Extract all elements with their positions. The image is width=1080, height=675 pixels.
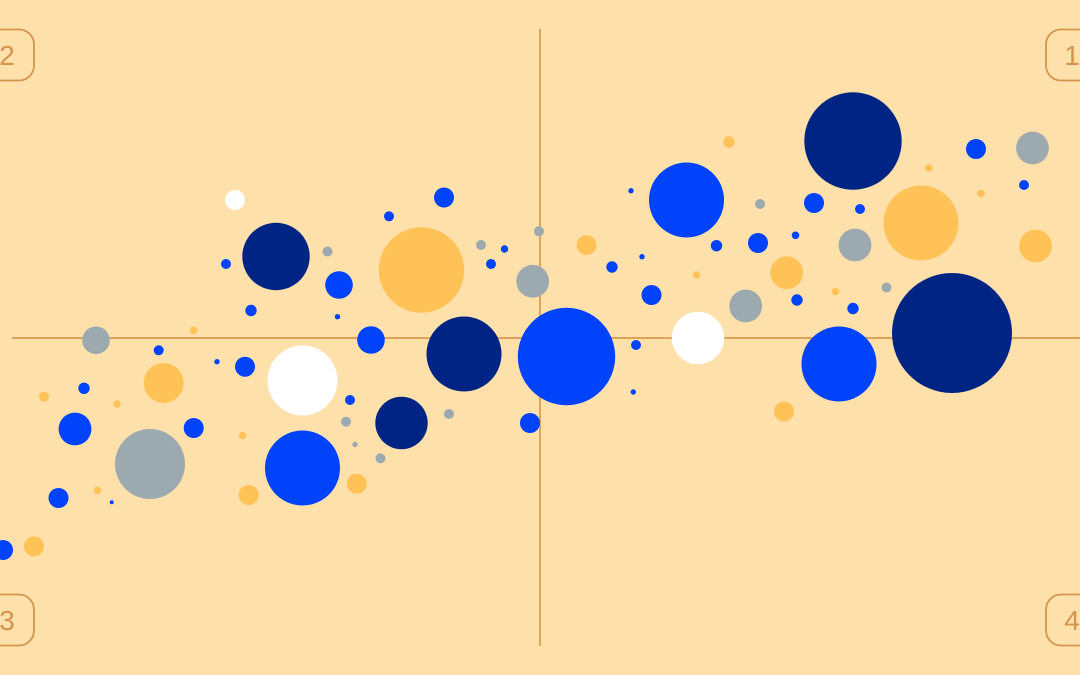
badge: quadrant 1 — [1046, 30, 1080, 80]
amber bubbles — [24, 136, 1052, 557]
grey bubbles — [82, 132, 1049, 499]
white bubbles — [225, 190, 724, 416]
badge: quadrant 4: 4 — [1064, 605, 1080, 636]
badge: quadrant 1: 1 — [1064, 40, 1080, 71]
badge: quadrant 3 — [0, 594, 34, 646]
bubble chart — [0, 92, 1052, 560]
bright blue bubbles — [0, 139, 1029, 560]
navy bubbles — [242, 92, 1012, 449]
badge: quadrant 4 — [1046, 594, 1080, 646]
badge: quadrant 2 — [0, 30, 34, 80]
